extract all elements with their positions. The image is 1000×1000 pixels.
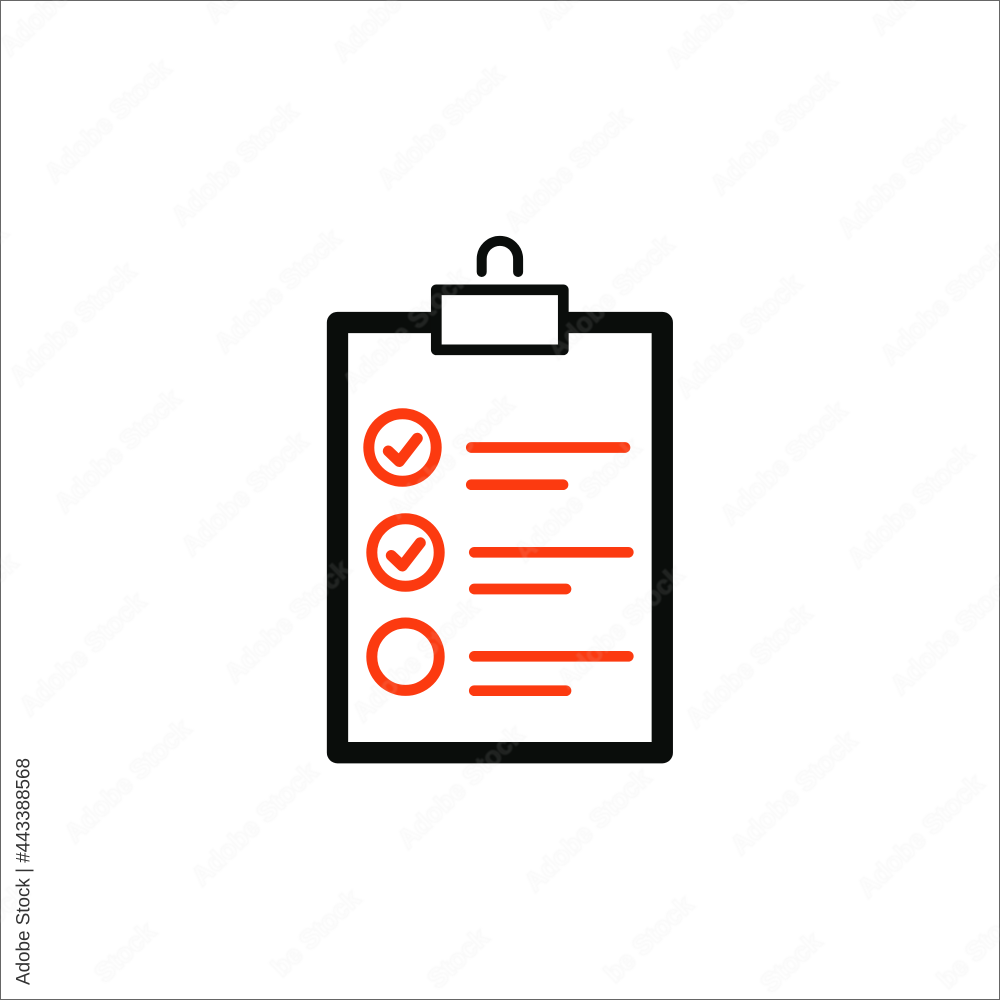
- checklist item 1: [369, 414, 625, 485]
- watermark pattern: be Stock: [598, 890, 699, 988]
- watermark pattern: Adobe Stock: [704, 65, 843, 200]
- watermark pattern: Adobe Stock: [218, 553, 357, 688]
- watermark pattern: Adobe Stock: [669, 268, 808, 403]
- checklist item 2: [372, 519, 628, 589]
- watermark pattern: Adobe Stock: [841, 438, 980, 573]
- watermark pattern: Adobe Stock: [498, 102, 637, 237]
- stock image number: Adobe Stock | #443388568: [14, 758, 34, 985]
- watermark pattern: Adobe Stock: [38, 53, 177, 188]
- watermark pattern: Stock: [421, 922, 494, 994]
- watermark pattern: Adobe Stock: [831, 108, 970, 243]
- watermark pattern: Adobe Stock: [851, 768, 990, 903]
- clip body: [436, 290, 563, 350]
- watermark pattern: Adobe Stock: [541, 229, 680, 364]
- watermark pattern: Adobe Stock: [724, 725, 863, 860]
- watermark pattern: Adobe Stock: [346, 592, 485, 727]
- watermark pattern: Adobe Stock: [518, 762, 657, 897]
- watermark pattern: Adobe Stock: [175, 426, 314, 561]
- watermark pattern: Adobe Stock: [13, 586, 152, 721]
- watermark pattern: Adobe Stock: [336, 262, 475, 397]
- checklist item 3: [372, 623, 628, 691]
- watermark pattern: Adobe Stock: [165, 96, 304, 231]
- watermark pattern: be Stock: [265, 884, 366, 982]
- watermark pattern: Adobe Stock: [208, 223, 347, 358]
- icon: clipboard: [338, 241, 662, 753]
- watermark pattern: Adobe Stock: [371, 59, 510, 194]
- watermark pattern: Adobe Stock: [508, 432, 647, 567]
- watermark pattern: Adobe Stock: [391, 719, 530, 854]
- watermark pattern: Adobe Stock: [48, 383, 187, 518]
- watermark pattern: Adobe Stock: [381, 389, 520, 524]
- watermark pattern: Adobe Stock: [551, 559, 690, 694]
- watermark pattern: Adobe Stock: [3, 256, 142, 391]
- watermark pattern: Stock: [754, 926, 827, 998]
- watermark pattern: Adobe Stock: [58, 713, 197, 848]
- clipboard board: [338, 322, 662, 753]
- watermark pattern: Adobe Stock: [185, 756, 324, 891]
- watermark pattern: Adobe Stock: [714, 395, 853, 530]
- watermark pattern: Stock: [88, 916, 161, 988]
- watermark pattern: Adobe Stock: [679, 598, 818, 733]
- clip hook: [482, 241, 518, 272]
